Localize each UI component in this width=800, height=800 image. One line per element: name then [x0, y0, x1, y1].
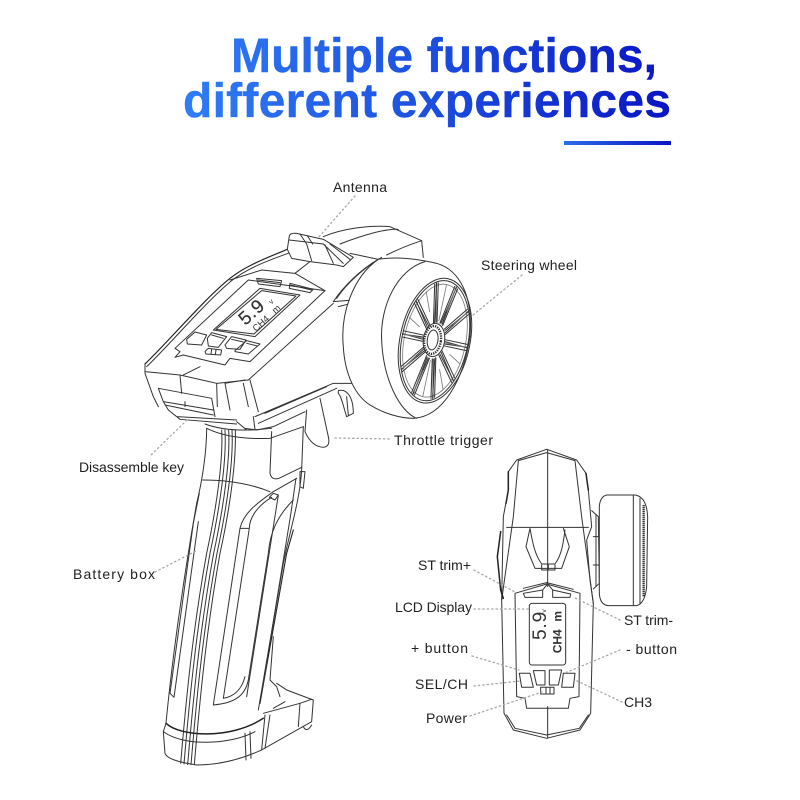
LCD readout: 5.9	[530, 611, 551, 640]
title: different experiences	[183, 75, 671, 128]
label: Battery box: Battery box	[73, 566, 155, 582]
label: Antenna: Antenna	[333, 179, 387, 195]
label: Throttle trigger: Throttle trigger	[394, 432, 493, 448]
label: Power: Power	[426, 710, 467, 726]
title: Multiple functions,	[231, 30, 657, 83]
panel	[175, 280, 325, 365]
LCD readout: v	[267, 297, 276, 306]
fin antenna	[287, 233, 353, 267]
LCD readout: m	[551, 611, 565, 622]
title underline	[564, 141, 671, 145]
label: ST trim+: ST trim+	[418, 557, 471, 573]
trigger	[305, 398, 329, 447]
lower ridge	[237, 383, 352, 430]
body side	[248, 303, 333, 380]
label: Disassemble key: Disassemble key	[79, 459, 184, 475]
LCD readout: CH4	[251, 314, 271, 333]
panel buttons	[187, 278, 313, 355]
side wheel	[592, 511, 599, 589]
label: ST trim-: ST trim-	[624, 612, 673, 628]
LCD readout: m	[270, 303, 283, 315]
label: CH3: CH3	[624, 694, 652, 710]
LCD readout	[530, 609, 565, 653]
illustration: transmitter top view	[497, 449, 648, 738]
label: - button: - button	[626, 641, 677, 657]
neck	[333, 257, 382, 307]
label: + button: + button	[411, 640, 468, 656]
LCD readout: 5.9	[234, 295, 269, 329]
label: Steering wheel: Steering wheel	[481, 257, 577, 273]
antenna fin	[526, 528, 569, 570]
LCD readout	[234, 295, 283, 333]
grip	[163, 427, 313, 765]
control panel	[515, 584, 580, 708]
label: LCD Display: LCD Display	[395, 599, 472, 615]
steering wheel	[343, 253, 494, 428]
illustration: transmitter side view	[145, 226, 494, 765]
body upper	[323, 226, 423, 257]
LCD readout: v	[541, 609, 548, 613]
LCD readout: CH4	[551, 629, 565, 653]
body and wheel	[145, 226, 494, 447]
title	[183, 30, 671, 128]
front slot	[158, 388, 237, 424]
housing	[502, 449, 593, 738]
label: SEL/CH: SEL/CH	[415, 676, 468, 692]
leader lines	[150, 196, 622, 716]
